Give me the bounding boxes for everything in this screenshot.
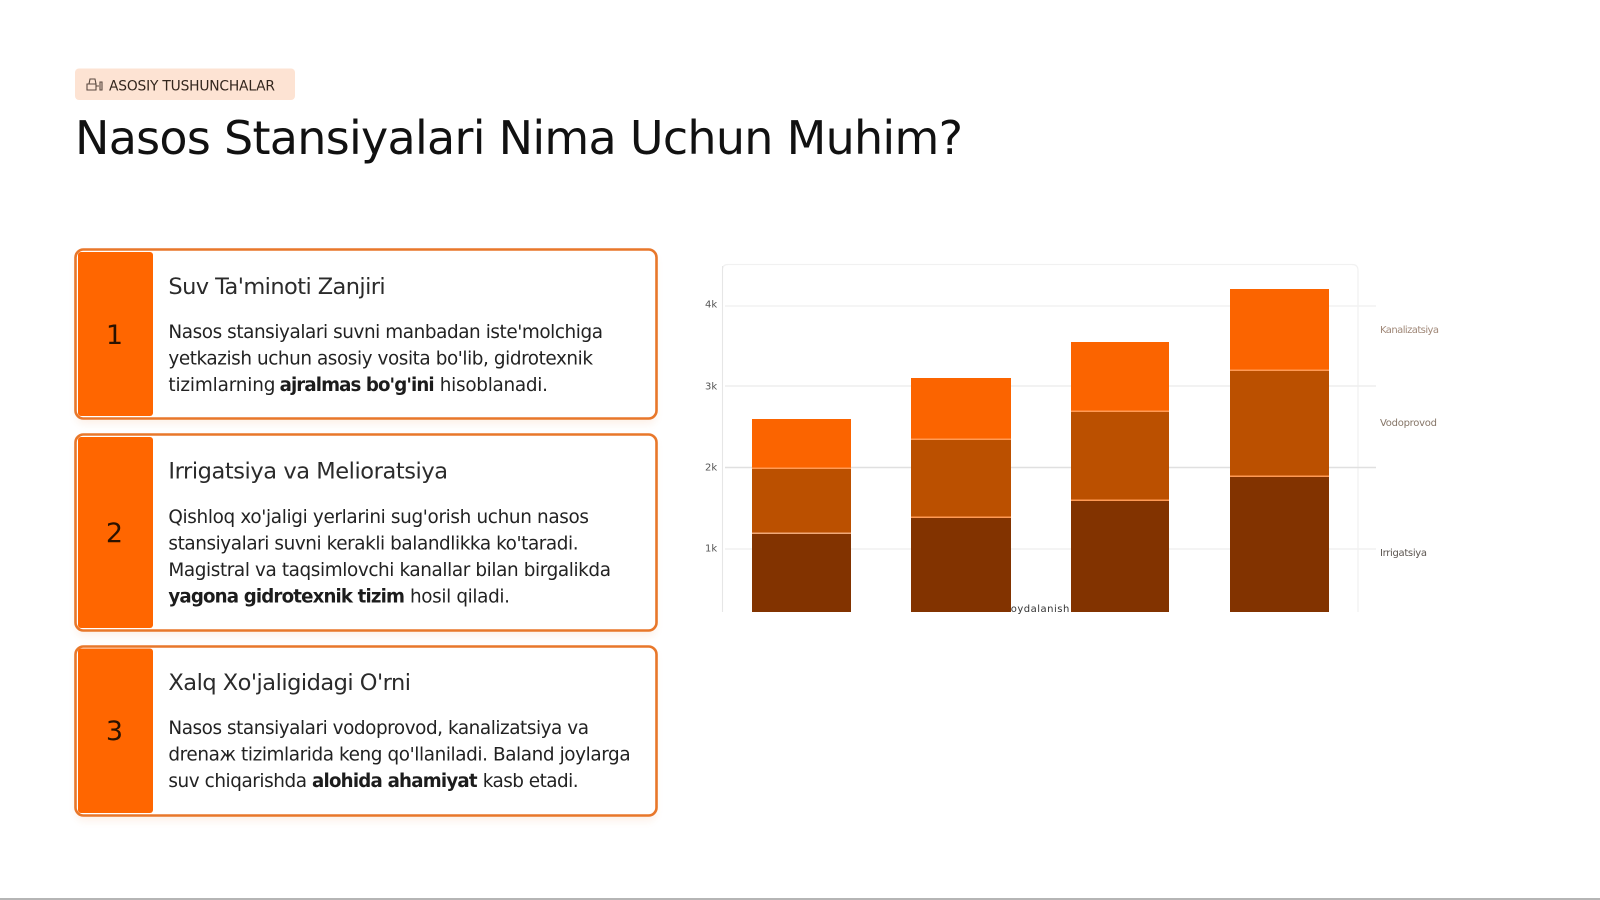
body text 3: Nasos stansiyalari vodoprovod, kanalizatsiya va bbox=[168, 718, 589, 739]
body text 3: alohida ahamiyat bbox=[312, 771, 478, 792]
y axis labels: 2k bbox=[705, 462, 717, 474]
body text 1: yetkazish uchun asosiy vosita bo'lib, gidrotexnik bbox=[168, 348, 593, 369]
body text 3: kasb etadi. bbox=[483, 771, 579, 792]
body text 3: drenaж tizimlarida keng qo'llaniladi. Baland joylarga bbox=[168, 744, 631, 765]
chart frame bbox=[722, 264, 1358, 612]
body text 1: ajralmas bo'g'ini bbox=[280, 375, 435, 396]
x axis title: Suv Foydalanish Sohasi bbox=[981, 604, 1109, 615]
body text 3: suv chiqarishda bbox=[168, 771, 307, 792]
body text 1 bbox=[168, 322, 603, 396]
y axis labels: 4k bbox=[705, 300, 717, 310]
title: Nasos Stansiyalari Nima Uchun Muhim? bbox=[75, 111, 963, 165]
body text 2: stansiyalari suvni kerakli balandlikka ko'taradi. bbox=[168, 533, 579, 554]
heading 1: Suv Ta'minoti Zanjiri bbox=[168, 274, 386, 300]
panel: card 2 bbox=[76, 434, 656, 636]
heading 2: Irrigatsiya va Melioratsiya bbox=[168, 459, 448, 485]
bar 1 bbox=[752, 419, 851, 612]
body text 2 bbox=[168, 507, 611, 607]
y axis labels: 1k bbox=[705, 544, 717, 554]
number block 2: 2 bbox=[106, 518, 123, 549]
panel: card 1 bbox=[76, 250, 656, 424]
y axis line bbox=[722, 266, 724, 612]
body text 3 bbox=[168, 718, 631, 792]
bar 3 bbox=[1071, 342, 1169, 612]
badge: section label bbox=[75, 68, 295, 100]
body text 2: Qishloq xo'jaligi yerlarini sug'orish uchun nasos bbox=[168, 507, 589, 528]
chart: stacked bars by usage area bbox=[705, 264, 1439, 615]
y axis labels: 3k bbox=[705, 382, 717, 392]
number block 3 bbox=[78, 648, 153, 813]
series label: Vodoprovod: Vodoprovod bbox=[1380, 418, 1437, 429]
bar 2 bbox=[911, 378, 1011, 612]
bar 4 bbox=[1230, 289, 1329, 612]
number block 1 bbox=[78, 252, 153, 416]
body text 2: hosil qiladi. bbox=[410, 586, 510, 607]
number block 3: 3 bbox=[106, 716, 123, 747]
badge text: ASOSIY TUSHUNCHALAR bbox=[109, 78, 275, 94]
series label: Irrigatsiya: Irrigatsiya bbox=[1380, 548, 1427, 559]
y axis labels bbox=[705, 300, 717, 554]
number block 1: 1 bbox=[106, 320, 123, 351]
body text 1: Nasos stansiyalari suvni manbadan iste'molchiga bbox=[168, 322, 603, 343]
series label: Kanalizatsiya: Kanalizatsiya bbox=[1380, 325, 1439, 336]
heading 3: Xalq Xo'jaligidagi O'rni bbox=[168, 670, 411, 696]
body text 1: hisoblanadi. bbox=[440, 375, 548, 396]
body text 2: Magistral va taqsimlovchi kanallar bilan birgalikda bbox=[168, 560, 611, 581]
icon: pump bbox=[87, 79, 102, 90]
number block 2 bbox=[78, 437, 153, 628]
body text 2: yagona gidrotexnik tizim bbox=[168, 586, 405, 607]
grid lines bbox=[725, 306, 1376, 549]
panel: card 3 bbox=[76, 646, 656, 821]
body text 1: tizimlarning bbox=[168, 375, 275, 396]
